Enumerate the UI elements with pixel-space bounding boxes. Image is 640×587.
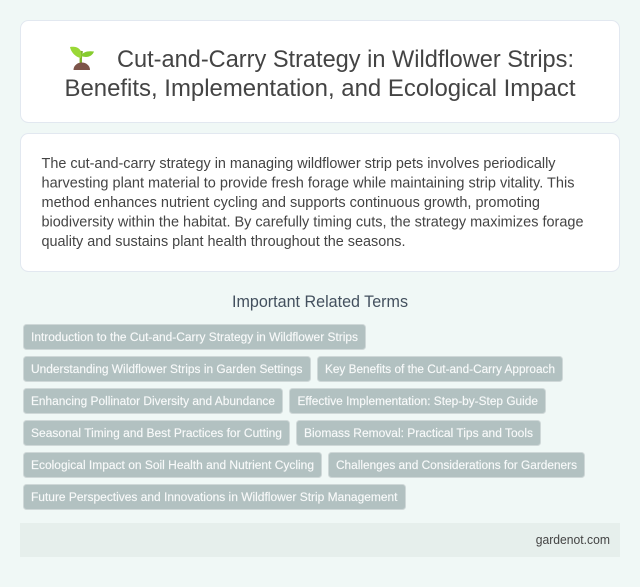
tag [24, 452, 322, 478]
description text: harvesting plant material to provide fresh forage while maintaining strip vitality. This [42, 176, 574, 192]
tag: Effective Implementation: Step-by-Step Guide [298, 394, 538, 408]
tag [296, 420, 540, 446]
tag: Biomass Removal: Practical Tips and Tools [304, 426, 533, 440]
panel: related term tags [24, 324, 584, 510]
description text: method enhances nutrient cycling and supports continuous growth, promoting [42, 195, 540, 211]
tag [24, 420, 290, 446]
title: Cut-and-Carry Strategy in Wildflower Strips: [117, 46, 574, 73]
tag [24, 324, 366, 350]
tag: Future Perspectives and Innovations in Wildflower Strip Management [31, 490, 398, 504]
description text [42, 156, 584, 250]
icon: sprout [70, 47, 94, 70]
heading: important related terms: Important Related Terms [232, 293, 408, 311]
footer site name: gardenot.com [536, 532, 610, 547]
description text: The cut-and-carry strategy in managing wildflower strip pets involves periodically [42, 156, 556, 172]
footer bar [20, 523, 620, 557]
panel: description card [20, 134, 620, 272]
description text: quality and sustains plant health throughout the seasons. [42, 234, 406, 250]
tag: Understanding Wildflower Strips in Garden Settings [31, 362, 302, 376]
tag: Ecological Impact on Soil Health and Nutrient Cycling [31, 458, 314, 472]
title: Benefits, Implementation, and Ecological Impact [64, 75, 576, 102]
title [64, 46, 576, 102]
tag [24, 356, 310, 382]
tag: Challenges and Considerations for Gardeners [336, 458, 577, 472]
tag [24, 484, 406, 510]
tag: Seasonal Timing and Best Practices for Cutting [31, 426, 282, 440]
tag: Enhancing Pollinator Diversity and Abundance [31, 394, 275, 408]
description text: biodiversity within the habitat. By carefully timing cuts, the strategy maximizes forage [42, 214, 584, 230]
tag: Key Benefits of the Cut-and-Carry Approach [325, 362, 555, 376]
panel: title card [20, 20, 620, 122]
tag [328, 452, 584, 478]
tag [318, 356, 562, 382]
tag [24, 388, 282, 414]
tag: Introduction to the Cut-and-Carry Strategy in Wildflower Strips [31, 330, 358, 344]
tag [290, 388, 546, 414]
